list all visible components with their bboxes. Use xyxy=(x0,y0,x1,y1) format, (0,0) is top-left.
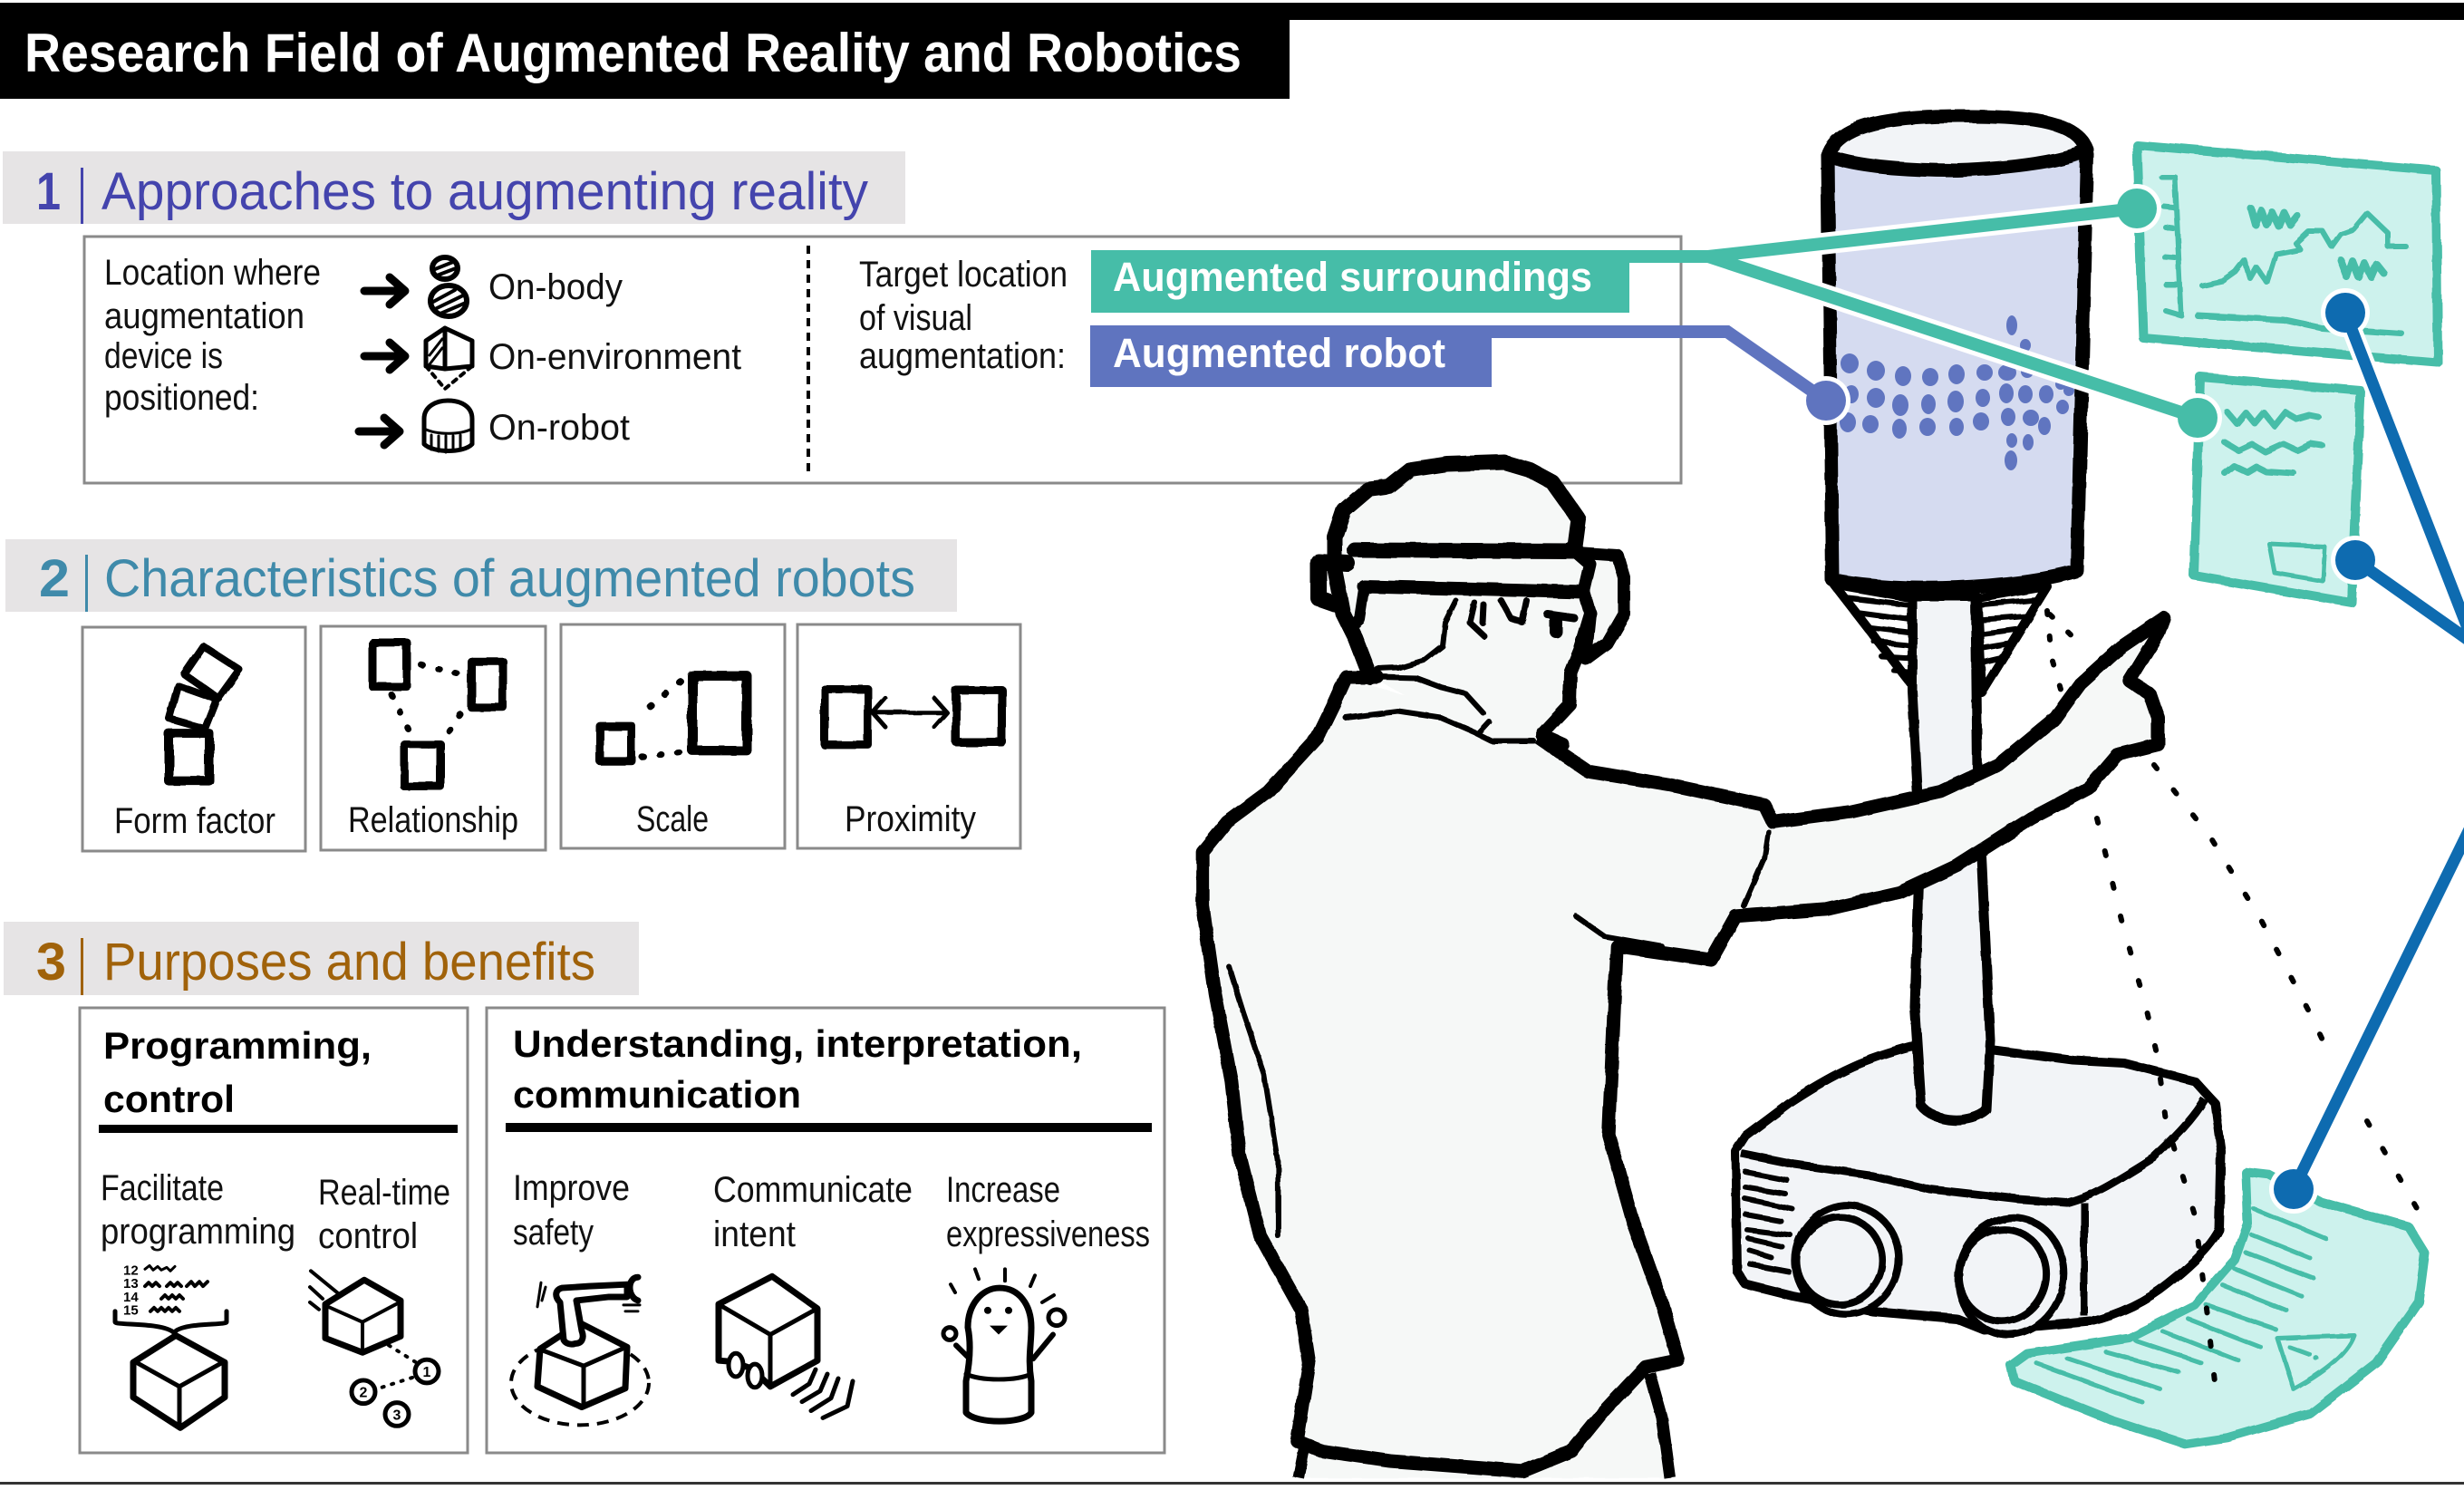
text: location xyxy=(104,253,321,418)
label: facilitate programming: Facilitate xyxy=(101,1168,224,1208)
icon: proximity xyxy=(825,689,1002,745)
label: increase expressiveness xyxy=(946,1170,1150,1254)
section 3 heading: Purposes and benefits xyxy=(103,933,595,992)
icon: on-environment xyxy=(426,328,472,389)
callout: augmented robot: Augmented robot xyxy=(1113,330,1445,376)
text: location: device is xyxy=(104,336,223,376)
text: target location: of visual xyxy=(859,298,972,338)
label: improve safety xyxy=(513,1168,630,1253)
neck and jaw xyxy=(1543,614,1590,732)
icon: facilitate programming xyxy=(115,1263,227,1427)
robot base xyxy=(1735,1047,2221,1345)
top bar xyxy=(0,3,2464,20)
label: communicate intent xyxy=(713,1170,913,1254)
body xyxy=(1203,618,2164,1478)
title xyxy=(0,3,1290,99)
panel: augmented surroundings 2 xyxy=(2194,377,2361,603)
robot cone xyxy=(1834,585,2047,692)
icon: facilitate programming: 14 xyxy=(123,1291,139,1305)
shirt collar xyxy=(1347,677,1563,745)
label: real-time control: control xyxy=(318,1216,418,1256)
clothing folds xyxy=(1229,832,1769,1235)
illustration: person xyxy=(1203,462,2164,1478)
text: location: Location where xyxy=(104,253,321,293)
label: facilitate programming xyxy=(101,1168,295,1252)
label: on-robot: On-robot xyxy=(488,408,630,448)
icon: real-time control: 2 xyxy=(360,1386,368,1401)
section 1 heading: Approaches to augmenting reality xyxy=(101,162,868,221)
icon: real-time control: 1 xyxy=(423,1365,431,1380)
panel: programming, control xyxy=(80,1008,468,1453)
text: target location: Target location xyxy=(859,255,1068,295)
heading xyxy=(513,1022,1082,1116)
icon: arrow on-robot xyxy=(359,418,400,445)
section 3 heading: 3 xyxy=(36,933,66,992)
icon: arrow on-body xyxy=(364,277,405,305)
face details xyxy=(1346,601,1534,741)
icon: relationship xyxy=(372,643,503,787)
label: increase expressiveness: expressiveness xyxy=(946,1214,1150,1254)
icon: arrow on-environment xyxy=(364,343,405,370)
section 2 heading: Characteristics of augmented robots xyxy=(104,549,915,608)
icon: facilitate programming: 12 xyxy=(123,1263,139,1278)
icon: scale xyxy=(600,676,747,761)
icon: real-time control xyxy=(310,1271,439,1426)
robot pole xyxy=(1912,596,1990,1120)
label: Relationship xyxy=(348,800,518,840)
label: improve safety: Improve xyxy=(513,1168,630,1208)
icon: increase expressiveness xyxy=(943,1269,1065,1421)
title: Research Field of Augmented Reality and Robotics xyxy=(24,23,1242,83)
label: real-time control: Real-time xyxy=(318,1173,450,1213)
heading: Programming, xyxy=(103,1024,372,1067)
icon: on-robot xyxy=(424,401,472,452)
label: real-time control xyxy=(318,1173,450,1256)
label: facilitate programming: programming xyxy=(101,1212,295,1252)
panel: approaches xyxy=(84,237,1681,483)
icon: real-time control: 3 xyxy=(393,1408,401,1423)
callout: augmented surroundings: Augmented surroundings xyxy=(1113,254,1592,300)
section 3 heading xyxy=(4,922,639,995)
connector: robot to surroundings xyxy=(2269,288,2464,1214)
projected dots xyxy=(1840,315,2074,470)
heading: control xyxy=(103,1078,235,1120)
shirt and arm xyxy=(1203,618,2164,1471)
text: target location xyxy=(859,255,1068,376)
icon: form factor xyxy=(169,646,239,781)
panel: augmented surroundings 1 xyxy=(2137,145,2438,363)
callout: augmented surroundings xyxy=(1091,184,2222,442)
label: communicate intent: Communicate xyxy=(713,1170,913,1210)
trousers xyxy=(1299,1374,1670,1478)
icon: facilitate programming: 13 xyxy=(123,1277,139,1292)
panel: understanding, interpretation, communication xyxy=(487,1008,1164,1453)
panel: relationship xyxy=(321,626,546,850)
panel: scale xyxy=(561,624,785,848)
label: communicate intent: intent xyxy=(713,1214,796,1254)
label: Form factor xyxy=(114,801,275,841)
heading xyxy=(103,1024,372,1120)
label: increase expressiveness: Increase xyxy=(946,1170,1060,1210)
icon: improve safety xyxy=(511,1277,649,1425)
label: on-environment: On-environment xyxy=(488,337,741,377)
bottom rule xyxy=(0,1482,2464,1485)
visor bands xyxy=(1355,550,1577,551)
robot cylinder xyxy=(1828,116,2087,588)
label: improve safety: safety xyxy=(513,1213,594,1253)
panel: form factor xyxy=(82,627,305,851)
section 1 heading: 1 xyxy=(36,162,61,221)
icon: communicate intent xyxy=(719,1276,853,1417)
text: target location: augmentation: xyxy=(859,336,1066,376)
divider xyxy=(807,246,810,474)
chart xyxy=(2202,213,2406,285)
label: Scale xyxy=(636,799,709,839)
label: on-body: On-body xyxy=(488,267,623,307)
text: location: augmentation xyxy=(104,296,304,336)
text: location: positioned: xyxy=(104,378,259,418)
label: Proximity xyxy=(845,799,976,839)
heading: communication xyxy=(513,1073,801,1116)
head xyxy=(1319,462,1624,745)
icon: on-body xyxy=(430,257,467,316)
panel: proximity xyxy=(797,624,1020,848)
dotted projection lines xyxy=(2047,611,2425,1390)
icon: facilitate programming: 15 xyxy=(123,1304,139,1319)
headset right side xyxy=(1577,553,1624,659)
section 2 heading: 2 xyxy=(39,549,70,608)
heading: Understanding, interpretation, xyxy=(513,1022,1082,1065)
panel: augmented surroundings 3 xyxy=(2011,1172,2425,1444)
illustration: robot xyxy=(1735,116,2221,1345)
callout: augmented robot xyxy=(1090,325,1850,425)
